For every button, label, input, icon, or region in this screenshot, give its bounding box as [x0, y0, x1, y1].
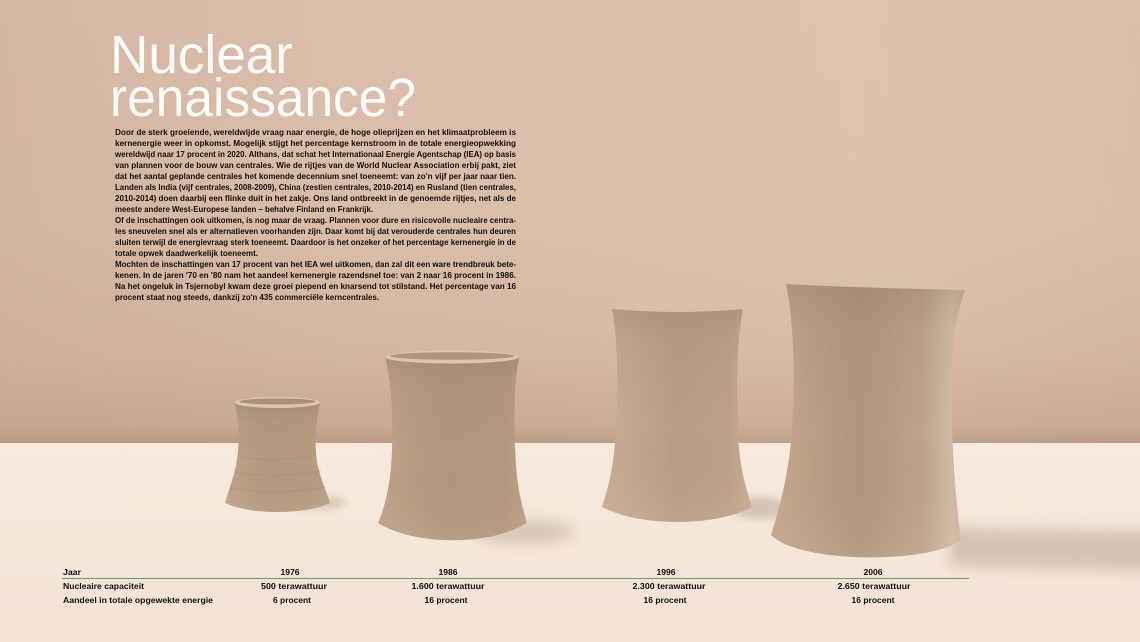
- intro text block: dat het aantal geplande centrales het komende decennium snel toeneemt: van zo'n vijf per jaar naar tien.: [115, 172, 516, 181]
- row: aandeel in totale opgewekte energie: 16 procent: [424, 595, 468, 605]
- intro text block: Of de inschattingen ook uitkomen, is nog maar de vraag. Plannen voor dure en risicovolle nucleaire centra-: [115, 216, 516, 225]
- row: jaar: Jaar: [63, 567, 82, 577]
- row: jaar: 1996: [656, 567, 676, 577]
- row: jaar: 1986: [438, 567, 458, 577]
- table surface: [0, 443, 1140, 642]
- intro text block: kernenergie weer in opkomst. Mogelijk stijgt het percentage kernstroom in de totale energieopwekking: [115, 139, 516, 148]
- intro text block: procent staat nog steeds, dankzij zo'n 435 commerciële kerncentrales.: [115, 293, 379, 302]
- intro text block: van plannen voor de bouw van centrales. Wie de rijtjes van de World Nuclear Association erbij pakt, ziet: [115, 161, 516, 170]
- intro text block: sluiten terwijl de energievraag sterk toeneemt. Daardoor is het onzeker of het percentage kernenergie in de: [115, 238, 516, 247]
- row: nucleaire capaciteit: Nucleaire capaciteit: [63, 581, 144, 591]
- background wall: [0, 0, 1140, 444]
- row: nucleaire capaciteit: 1.600 terawattuur: [412, 581, 485, 591]
- row: nucleaire capaciteit: 500 terawattuur: [261, 581, 328, 591]
- intro text block: Mochten de inschattingen van 17 procent van het IEA wel uitkomen, dan zal dit een ware trendbreuk bete-: [115, 260, 516, 269]
- title: [110, 25, 416, 128]
- cooling tower 1996: [602, 304, 788, 522]
- intro text block: 2010-2014) doen daarbij een flinke duit in het zakje. Ons land ontbreekt in de genoemde rijtjes, net als de: [115, 194, 516, 203]
- row: aandeel in totale opgewekte energie: 16 procent: [852, 595, 895, 605]
- data table: [62, 567, 969, 605]
- intro text block: Door de sterk groeiende, wereldwijde vraag naar energie, de hoge olieprijzen en het klimaatprobleem is: [115, 128, 516, 137]
- intro text block: Landen als India (vijf centrales, 2008-2009), China (zestien centrales, 2010-2014) en Rusland (tien centrales,: [115, 183, 516, 192]
- row: aandeel in totale opgewekte energie: Aandeel in totale opgewekte energie: [63, 595, 213, 605]
- row: jaar: 1976: [280, 567, 300, 577]
- row: nucleaire capaciteit: 2.650 terawattuur: [838, 581, 911, 591]
- intro text block: Na het ongeluk in Tsjernobyl kwam deze groei piepend en knarsend tot stilstand. Het percentage van 16: [115, 282, 516, 291]
- title: renaissance?: [110, 68, 416, 128]
- intro text block: meeste andere West-Europese landen – behalve Finland en Frankrijk.: [115, 205, 373, 214]
- cooling tower 1976: [225, 397, 346, 512]
- intro text block: wereldwijd naar 17 procent in 2020. Althans, dat schat het Internationaal Energie Agentschap (IEA) op basis: [114, 150, 516, 159]
- row: aandeel in totale opgewekte energie: 16 procent: [644, 595, 687, 605]
- row: jaar: 2006: [863, 567, 883, 577]
- cooling tower 1986: [378, 350, 575, 543]
- row: aandeel in totale opgewekte energie: 6 procent: [273, 595, 311, 605]
- row: jaar: [63, 567, 883, 577]
- title: Nuclear: [110, 25, 293, 85]
- intro text block: totale opwek daadwerkelijk toeneemt.: [115, 249, 258, 258]
- row: nucleaire capaciteit: [63, 581, 911, 591]
- intro text block: [114, 128, 516, 302]
- row: nucleaire capaciteit: 2.300 terawattuur: [632, 581, 706, 591]
- cooling tower 2006: [771, 279, 1140, 572]
- intro text block: les sneuvelen snel als er alternatieven voorhanden zijn. Daar komt bij dat verouderde centrales hun deuren: [115, 227, 516, 236]
- row: aandeel in totale opgewekte energie: [63, 595, 895, 605]
- intro text block: kenen. In de jaren '70 en '80 nam het aandeel kernenergie razendsnel toe: van 2 naar 16 procent in 1986.: [115, 271, 516, 280]
